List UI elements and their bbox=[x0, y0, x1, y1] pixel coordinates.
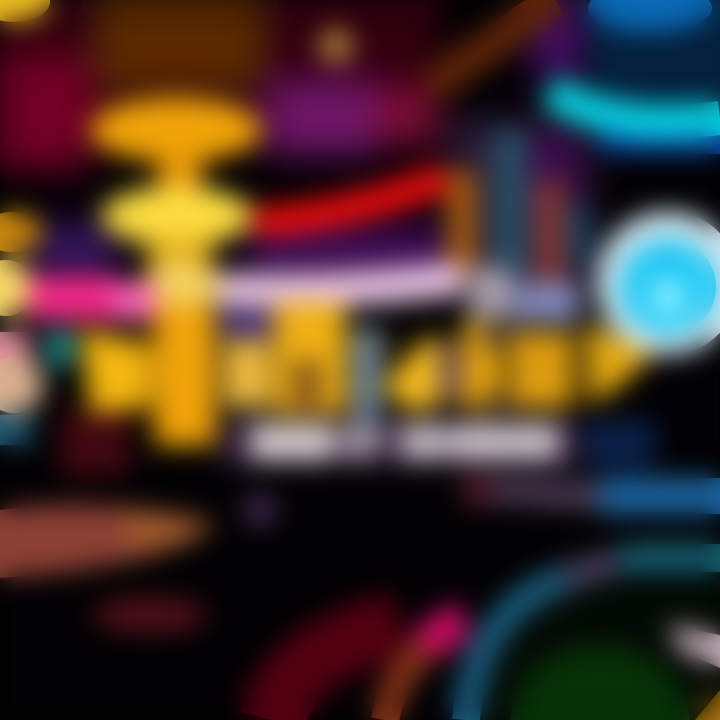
small blue spot bbox=[243, 493, 277, 527]
chandelier: left bbox=[0, 212, 42, 316]
red curved band bbox=[255, 178, 445, 222]
green table bbox=[466, 544, 720, 720]
title: WIN GOLD bbox=[90, 318, 640, 417]
grey-blue band right bbox=[470, 268, 580, 322]
pink neon band bbox=[30, 276, 157, 320]
bottom table arcs bbox=[272, 620, 465, 720]
subtitle: PLAY IT TO PLAY bbox=[250, 423, 560, 461]
title bbox=[80, 302, 654, 446]
background: ceiling and walls bbox=[0, 0, 590, 290]
right teal band bbox=[462, 474, 720, 514]
subtitle bbox=[220, 420, 580, 466]
column accents bbox=[447, 130, 592, 285]
circular neon sign bbox=[596, 211, 720, 355]
lilac neon band bbox=[218, 278, 462, 291]
top orange streak bbox=[430, 0, 555, 88]
lower-left red glow bbox=[92, 597, 208, 633]
roulette table left bbox=[0, 505, 215, 578]
band lower purple bbox=[222, 314, 280, 336]
small ceiling light bbox=[318, 28, 354, 64]
lower right dark mass and blue bbox=[585, 360, 720, 468]
top-right blue dome bbox=[550, 0, 720, 154]
left edge elements bbox=[0, 330, 130, 475]
top-left yellow light bbox=[0, 0, 50, 22]
chandelier: main bbox=[90, 98, 262, 309]
